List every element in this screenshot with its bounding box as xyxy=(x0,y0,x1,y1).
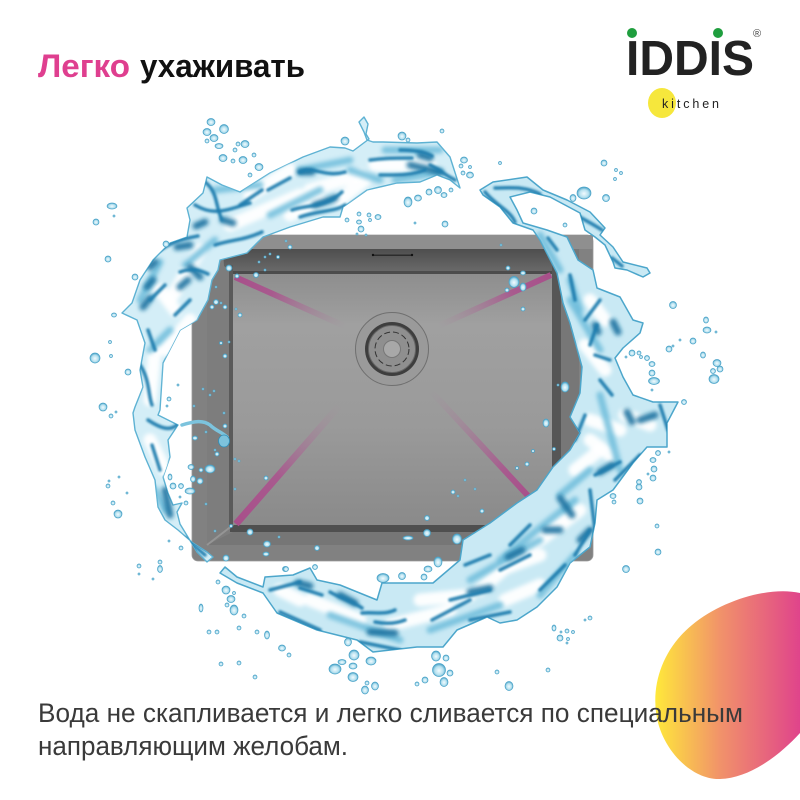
arc flow detail xyxy=(270,188,668,650)
sink xyxy=(192,235,593,561)
logo: IDDIS kitchen xyxy=(626,28,761,118)
drainage groove: bottom right xyxy=(430,390,530,498)
description text xyxy=(38,698,743,761)
logo wordmark: IDDIS xyxy=(626,32,754,86)
logo green dots xyxy=(627,28,723,38)
overflow slot xyxy=(372,254,413,256)
sink front ledge xyxy=(207,532,560,545)
arc flow detail xyxy=(140,150,455,555)
small splash strand xyxy=(182,422,227,437)
description line 2: направляющим желобам. xyxy=(38,731,348,761)
drain xyxy=(356,312,428,386)
description line 1: Вода не скапливается и легко сливается по специальным xyxy=(38,698,743,728)
drainage groove: top right xyxy=(425,275,551,332)
title accent word: Легко xyxy=(38,48,130,84)
drainage groove: bottom left xyxy=(236,405,340,524)
decorative gradient blob xyxy=(655,591,800,779)
sink recess xyxy=(223,249,562,272)
splash droplet end xyxy=(218,435,230,447)
title second word: ухаживать xyxy=(140,48,305,84)
sink floor xyxy=(233,274,552,525)
logo yellow blob xyxy=(648,88,676,118)
water swirl: top and left arc xyxy=(122,117,460,562)
water droplets xyxy=(90,118,723,694)
sink rim xyxy=(192,235,593,561)
water swirl: right and bottom arc xyxy=(220,177,678,652)
drainage groove: top left xyxy=(235,277,358,332)
registered mark: ® xyxy=(753,28,761,40)
title xyxy=(38,48,305,84)
arc body xyxy=(220,177,678,652)
arc body xyxy=(122,117,460,562)
logo subtitle: kitchen xyxy=(662,97,719,111)
